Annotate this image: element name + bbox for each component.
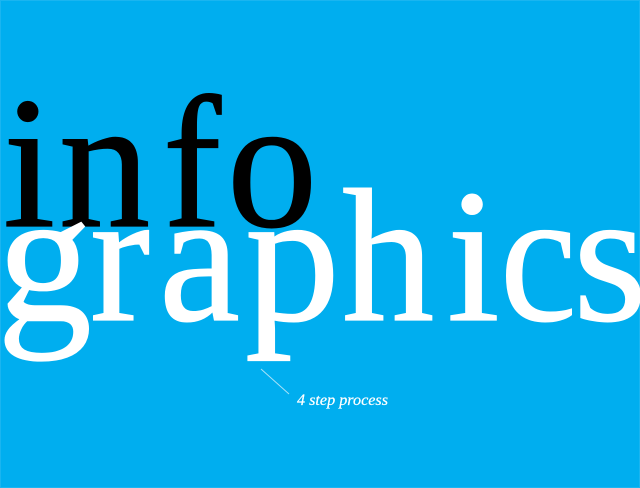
heading: graphics: p	[245, 152, 340, 362]
heading: info: f	[163, 59, 222, 267]
heading: graphics: h	[342, 151, 434, 362]
heading: info: n	[59, 60, 150, 268]
heading: graphics: a	[159, 152, 240, 362]
heading: info: o	[227, 59, 317, 267]
heading: info: i	[3, 58, 55, 267]
heading: graphics: r	[90, 152, 150, 362]
heading: graphics	[0, 151, 640, 362]
heading: info	[3, 58, 317, 268]
heading: graphics: i	[447, 152, 500, 362]
heading: graphics: c	[500, 152, 577, 362]
caption: 4 step process: 4 step process	[297, 392, 388, 409]
leader line	[261, 369, 289, 394]
